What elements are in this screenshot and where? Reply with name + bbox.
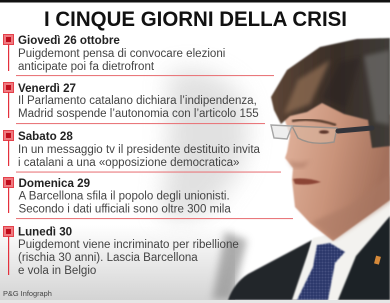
face xyxy=(284,95,390,241)
marker xyxy=(4,34,14,71)
timeline: Venerdì 27 xyxy=(4,82,265,124)
timeline: Domenica 29 xyxy=(4,177,293,219)
description: i catalani a una «opposizione democratica» xyxy=(18,157,239,169)
jacket left xyxy=(228,240,312,300)
icon: glasses xyxy=(271,125,372,143)
lapel pin xyxy=(374,256,381,265)
tie xyxy=(297,243,345,300)
top bar xyxy=(0,0,390,2)
heading: Giovedì 26 ottobre xyxy=(18,34,120,47)
description: Madrid sospende l’autonomia con l’articolo 155 xyxy=(18,108,259,120)
description: (rischia 30 anni). Lascia Barcellona xyxy=(18,252,198,264)
bottom border xyxy=(0,300,390,303)
title: I CINQUE GIORNI DELLA CRISI xyxy=(44,8,347,31)
neck shadow xyxy=(312,175,390,240)
heading: Sabato 28 xyxy=(18,130,73,143)
shirt xyxy=(292,196,390,300)
hair xyxy=(271,38,390,148)
nose shadow xyxy=(288,160,310,168)
portrait: Puigdemont xyxy=(228,38,390,300)
heading: Lunedì 30 xyxy=(18,226,72,238)
credit: P&G Infograph xyxy=(3,289,52,298)
description: Puigdemont viene incriminato per ribellione xyxy=(18,239,239,251)
eyebrow xyxy=(292,120,336,125)
hair highlights xyxy=(284,60,330,114)
description: e vola in Belgio xyxy=(18,265,96,277)
description: Puigdemont pensa di convocare elezioni xyxy=(18,48,225,60)
heading: Domenica 29 xyxy=(18,177,91,190)
description: A Barcellona sfila il popolo degli unionisti. xyxy=(18,190,230,202)
description: anticipate poi fa dietrofront xyxy=(18,61,155,73)
jacket right xyxy=(338,216,390,300)
marker xyxy=(4,178,14,213)
timeline: Lunedì 30 xyxy=(4,226,239,277)
description: Secondo i dati ufficiali sono oltre 300 mila xyxy=(18,204,231,216)
marker xyxy=(4,82,14,118)
marker xyxy=(4,130,14,166)
heading: Venerdì 27 xyxy=(18,82,76,95)
background shadow silhouette xyxy=(0,70,248,300)
description: Il Parlamento catalano dichiara l’indipendenza, xyxy=(18,95,257,107)
eye xyxy=(319,130,329,134)
timeline: Giovedì 26 ottobre xyxy=(4,34,274,76)
description: In un messaggio tv il presidente destituito invita xyxy=(18,144,261,156)
timeline: Sabato 28 xyxy=(4,130,281,173)
mouth xyxy=(293,178,321,185)
marker xyxy=(4,226,14,275)
